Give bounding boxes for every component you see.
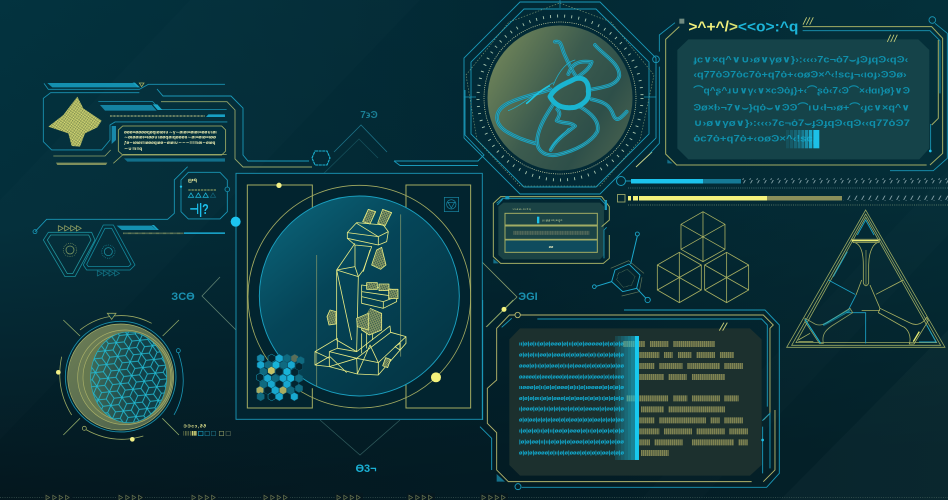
script body text: ɟϲ∨×q^∨∪›ø∨γø∨}›:‹‹‹›7ϲ¬ȯ7⌣ɟϿɟqϿ‹qϿ‹ [693, 54, 908, 64]
cyan code lines: øøø|ø|ıı|ø|ø|øø|ø|ıı|ø|øøø|ø|ø|ø|ø|ø|ø|øø [519, 363, 625, 369]
diamond pointer left [202, 277, 246, 340]
lower bars [53, 150, 227, 165]
icon: molecule [592, 232, 650, 303]
panel: login console [493, 196, 609, 263]
icon: twin triangle gears [43, 225, 225, 277]
icon: badge panel: ⊣|? [189, 202, 209, 218]
script body text: ⌒q^ʂ^ɹ∪∨γ‹∨×ϲϿȯɟ}+‹⌒ʂȯ‹7‹Ͽ⌒×‹ƚɑı}ø}∨Ͽ [692, 85, 910, 96]
panel: top-left mesh readout [43, 83, 227, 165]
header bars [44, 83, 225, 89]
heading: >^+^/><<o>:^q [688, 19, 798, 35]
microscope wireframe [315, 209, 406, 375]
chevron bottom [320, 420, 400, 455]
script body text: Ͽø×ƚ›¬7∨⌣}qȯ⌣∨ϿϿ⌒ı∪‹ƚ¬›ø+⌒‹ɟϲ∨×q^∨ [693, 101, 910, 112]
frame lines [480, 300, 779, 490]
label: bottom marker: Ө3¬ [355, 463, 377, 475]
tick ring [478, 16, 642, 180]
icon: isometric cubes [657, 212, 749, 303]
cyan code lines: |ø|ø|øø|ıı|ıı|ø|ø|ø|ø|øøø|ø|ø|ø|ø|ø|ø|øø [519, 440, 625, 446]
indicator dots [231, 183, 441, 382]
script body text: ȯϲ7ȯ+q7ȯ+‹oøϿ×^‹!sϲɟ [693, 134, 818, 144]
cyan code lines: øøøøø|ø|øøø|øøø|ø|øøø|ø|ø|ø|øøø|ø|ø|øøø [519, 374, 625, 380]
progress bar: cyan [616, 176, 948, 188]
chevron top [317, 125, 387, 180]
panel: bottom data terminal [480, 300, 779, 490]
icon: badge panel [33, 167, 230, 234]
icon: square target [444, 197, 459, 212]
panel: sphere gauge [56, 313, 230, 442]
scan column [615, 336, 639, 460]
scan glyph bars [786, 130, 819, 148]
text block: ∼øıøøıøı≡ıøø∪ıøøqøıqøøøıı∼øı≡øıø≡ıøø [124, 135, 216, 140]
icon: badge panel: ᗴᖰᑫ [188, 178, 198, 183]
cyan code lines: ø|ø|øø|ø|ø|ø|øø|ø|ø|øø|ø|ø|ø|øø|ø|ø|ø|øø [519, 418, 625, 424]
data bars [98, 102, 227, 117]
cyan code lines: ıı|ø|ø|ıı|ø|ø|øøø|ø|ıı|ø|ø|øøøøø|ø|ø|ø|ø [519, 341, 625, 347]
connector lines to centre [157, 89, 484, 167]
script body text [692, 54, 910, 144]
lens circles [248, 185, 471, 408]
text block: øøø≡øøøøqøqıøıøı∪∼γ∼øıøı≡øıøı≡øø∪ıøı [124, 129, 217, 134]
specimen sphere [488, 26, 632, 170]
panel: top-right script terminal [650, 17, 947, 171]
hex cell grid [256, 354, 304, 401]
script body text: ∪›ø∨γø∨}›:‹‹‹›7ϲ¬ȯ7⌣ɟϿɟqϿ‹qϿ‹‹q77ȯϿ7 [693, 118, 910, 128]
cyan code lines: ı|ø|ø|ø|ıı|ø|ıı|øø|ø|øøø|ø|ıı|ø|ø|ø|ø|ø|ø [519, 429, 625, 435]
icon: hexagon node [312, 151, 330, 165]
form row: button: øø [549, 245, 554, 249]
icon: yellow mesh star [48, 97, 102, 147]
dotted footer with arrows [0, 493, 948, 500]
panel: microscope viewer [231, 173, 482, 419]
form row: field [505, 226, 597, 239]
label: left marker: ЗϹӨ [171, 291, 195, 303]
frame [43, 93, 227, 150]
olive redacted lines [623, 344, 748, 453]
cyan code lines: ø|ø|ø|øøøø|ø|ıı|ø|ø|øøø|ø|ø|ø|ø|øø|ø|ø|ø [519, 450, 625, 456]
label: right marker: ЭԌI [518, 291, 538, 303]
side brackets [247, 185, 312, 408]
frame lines [650, 17, 947, 171]
script body text: ‹q77ȯϿ7ȯϲ7ȯ+q7ȯ+‹oøϿ×^‹!sϲɟ¬‹ıoɟ›ϿϿø› [693, 70, 907, 80]
cyan code lines: ı|øøø|ø|ø|ıı|ø|ø|øø|ø|ø|ø|øøøø|ø|øø|ø|ø [519, 407, 625, 413]
progress bar: yellow [618, 194, 948, 205]
outer arcs and ticks [60, 313, 183, 439]
label: top marker: 7϶Ͽ [360, 110, 378, 121]
icon: triangle schematic [787, 210, 945, 347]
text block: ƒø∼ıøıøı≡ıøøøqıøø∼øıøı∪∼∼∼≡≡≡ıøı∼øıøq [124, 140, 216, 145]
text block [112, 126, 226, 155]
panel: login console: ∪ıøø›¤ı≡q [512, 207, 531, 211]
text block: ∼∪≡ı≡q [124, 146, 143, 151]
cyan code lines: ø|ø|ø|ıı|øø|ø|øøø|ø|ø|ø|øø|ø|ıı|ø|ø|ø|ø|ø [519, 352, 625, 358]
brittle star specimen [497, 42, 627, 155]
cyan code lines: ø|ø|ø|øıı|ø|ø|øøø|ø|ø|øø|ø|ø|ø|ıı|ø|ø|ø|ø [519, 396, 625, 402]
legend [183, 424, 230, 436]
legend: ϿϿϲɔ,ϑϑ [183, 424, 206, 429]
mesh sphere [91, 332, 167, 423]
panel: specimen octagon [464, 0, 656, 194]
diamond pointer right [479, 259, 517, 327]
concentric olive rings [68, 324, 174, 430]
form row: input: ∪ıøø›¤ı≡q¤ [542, 218, 562, 222]
cyan code lines [519, 341, 625, 456]
cyan code lines: ııøøø|ø|ıı|ø|ø|øøø|ø|ıı|ø|ıøøøø|ø|ø|ø|ø [519, 385, 625, 391]
